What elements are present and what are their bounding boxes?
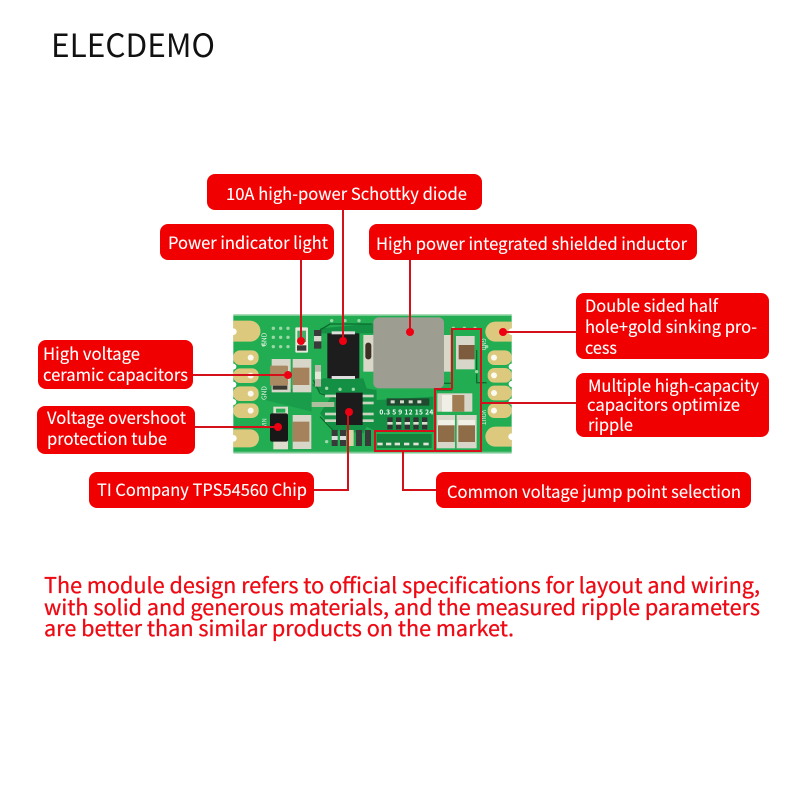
icon: shielded inductor [363,317,451,388]
silkscreen GND lower: GND [259,386,269,400]
callout: inductor [369,224,697,260]
callout: ceramic capacitors [38,340,193,389]
callout: overshoot protection: protection tube [47,425,167,450]
silkscreen GND right: GND [480,338,489,350]
callout: jump point: Common voltage jump point selection [447,478,741,503]
voltage selection silkscreen: 0.3 5 9 12 15 24 [379,407,433,417]
callout: high capacity capacitors [576,372,769,437]
icon: jumper and resistor rows [377,398,432,448]
callout: ceramic capacitors: High voltage [43,340,140,365]
callout: high capacity capacitors: capacitors optimize [587,391,740,416]
callout: half hole gold sinking [576,292,769,359]
callout: ceramic capacitors: ceramic capacitors [43,361,188,386]
description text [44,569,760,643]
silkscreen VIN: VIN [260,418,269,427]
icon: LED [295,327,308,353]
icon: input ceramic capacitors [270,359,311,392]
title: ELECDEMO [51,21,215,67]
callout: half hole gold sinking: hole+gold sinking pro- [585,313,757,338]
callout leader lines [193,210,576,490]
icon: Schottky diode [327,331,359,379]
callout: half hole gold sinking: cess [585,334,617,359]
callout: power indicator [160,224,334,260]
icon: capacitor lower left [293,415,311,449]
callout: jump point [436,472,751,508]
callout: power indicator: Power indicator light [168,229,329,254]
icon: overshoot protection tube [270,407,288,449]
description text: The module design refers to official specifications for layout and wiring, [44,569,760,600]
callout: Schottky diode [207,174,482,210]
callout: overshoot protection [37,404,195,454]
callout: chip [89,472,314,508]
icon: small resistor [314,330,321,349]
callout: high capacity capacitors: ripple [588,411,633,436]
callout: overshoot protection: Voltage overshoot [47,404,187,429]
silkscreen VOUT: VOUT [480,410,489,425]
copper traces [262,323,433,433]
callout: high capacity capacitors: Multiple high-capacity [588,372,759,397]
icon: TPS54560 chip [312,393,374,425]
callout: half hole gold sinking: Double sided half [585,292,719,317]
circuit board photo [230,314,515,453]
callout: chip: TI Company TPS54560 Chip [97,476,307,501]
icon: small passive parts [315,365,371,446]
leader end dots [274,328,507,431]
description text: are better than similar products on the market. [44,612,514,643]
icon: output capacitors [437,336,477,448]
vias [262,319,488,443]
callout: inductor: High power integrated shielded inductor [376,230,687,255]
silkscreen GND: GND [259,332,269,347]
description text: with solid and generous materials, and the measured ripple parameters [44,591,760,622]
callout: Schottky diode: 10A high-power Schottky diode [226,180,467,205]
